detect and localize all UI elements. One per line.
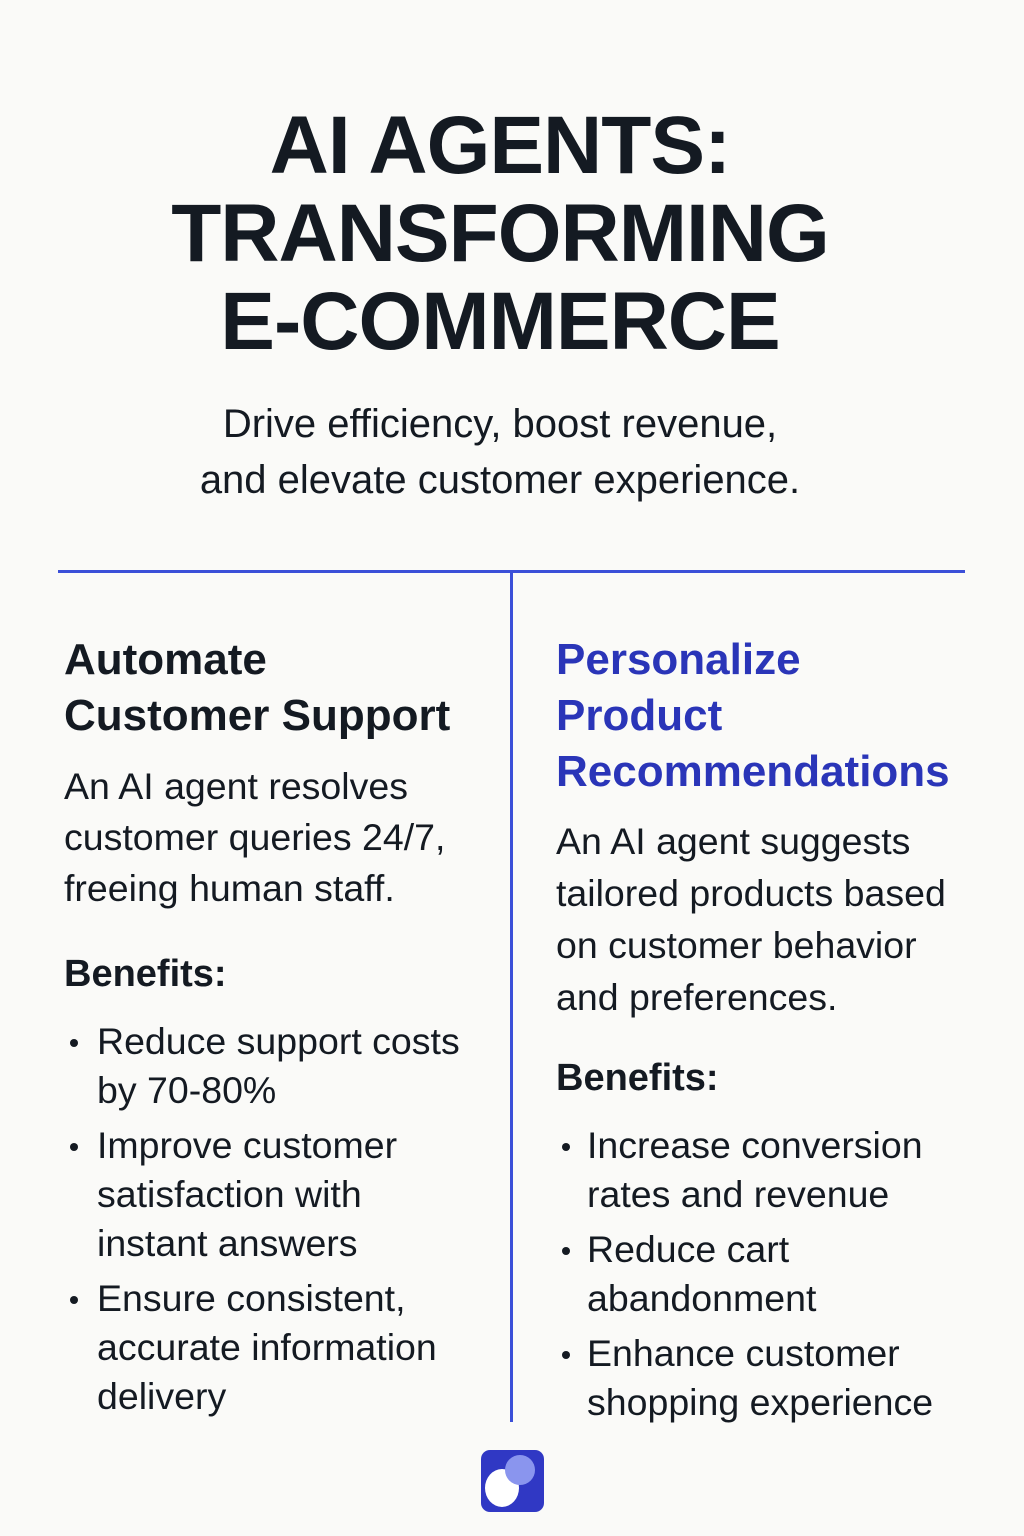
- subtitle: [200, 402, 800, 502]
- panel: automate customer support: [64, 635, 460, 1417]
- text: description: and preferences.: [556, 976, 837, 1018]
- heading: automate customer support: Automate: [64, 635, 267, 684]
- list: benefits: shopping experience: [587, 1381, 933, 1423]
- list: benefits: Ensure consistent,: [97, 1277, 406, 1319]
- list: benefits: [562, 1124, 933, 1423]
- list: benefits: Reduce support costs: [97, 1020, 460, 1062]
- heading: personalize product recommendations: Product: [556, 691, 722, 740]
- subtitle: Drive efficiency, boost revenue,: [223, 402, 777, 446]
- text: description: customer queries 24/7,: [64, 816, 445, 858]
- text: description: An AI agent resolves: [64, 765, 408, 807]
- list: benefits: delivery: [97, 1375, 226, 1417]
- heading: automate customer support: Customer Support: [64, 691, 450, 740]
- text: description: [64, 765, 445, 909]
- list: benefits: satisfaction with: [97, 1173, 362, 1215]
- icon: logo: [481, 1450, 544, 1512]
- text: description: on customer behavior: [556, 924, 917, 966]
- heading: benefits: Benefits:: [64, 953, 227, 995]
- heading: personalize product recommendations: [556, 635, 950, 796]
- text: description: freeing human staff.: [64, 867, 395, 909]
- text: description: tailored products based: [556, 872, 946, 914]
- list: benefits: rates and revenue: [587, 1173, 889, 1215]
- panel: personalize product recommendations: [556, 635, 950, 1423]
- list: benefits: [70, 1020, 460, 1417]
- title: E-COMMERCE: [220, 276, 780, 367]
- list: benefits: abandonment: [587, 1277, 816, 1319]
- list: benefits: Enhance customer: [587, 1332, 900, 1374]
- text: description: [556, 820, 946, 1018]
- title: [171, 100, 829, 367]
- list: benefits: Increase conversion: [587, 1124, 923, 1166]
- list: benefits: instant answers: [97, 1222, 358, 1264]
- heading: automate customer support: [64, 635, 450, 740]
- heading: benefits: Benefits:: [556, 1057, 719, 1099]
- subtitle: and elevate customer experience.: [200, 458, 800, 502]
- title: AI AGENTS:: [270, 100, 730, 191]
- list: benefits: accurate information: [97, 1326, 437, 1368]
- heading: personalize product recommendations: Recommendations: [556, 747, 950, 796]
- list: benefits: by 70-80%: [97, 1069, 276, 1111]
- title: TRANSFORMING: [171, 188, 829, 279]
- text: description: An AI agent suggests: [556, 820, 910, 862]
- heading: personalize product recommendations: Personalize: [556, 635, 801, 684]
- list: benefits: Reduce cart: [587, 1228, 789, 1270]
- list: benefits: Improve customer: [97, 1124, 397, 1166]
